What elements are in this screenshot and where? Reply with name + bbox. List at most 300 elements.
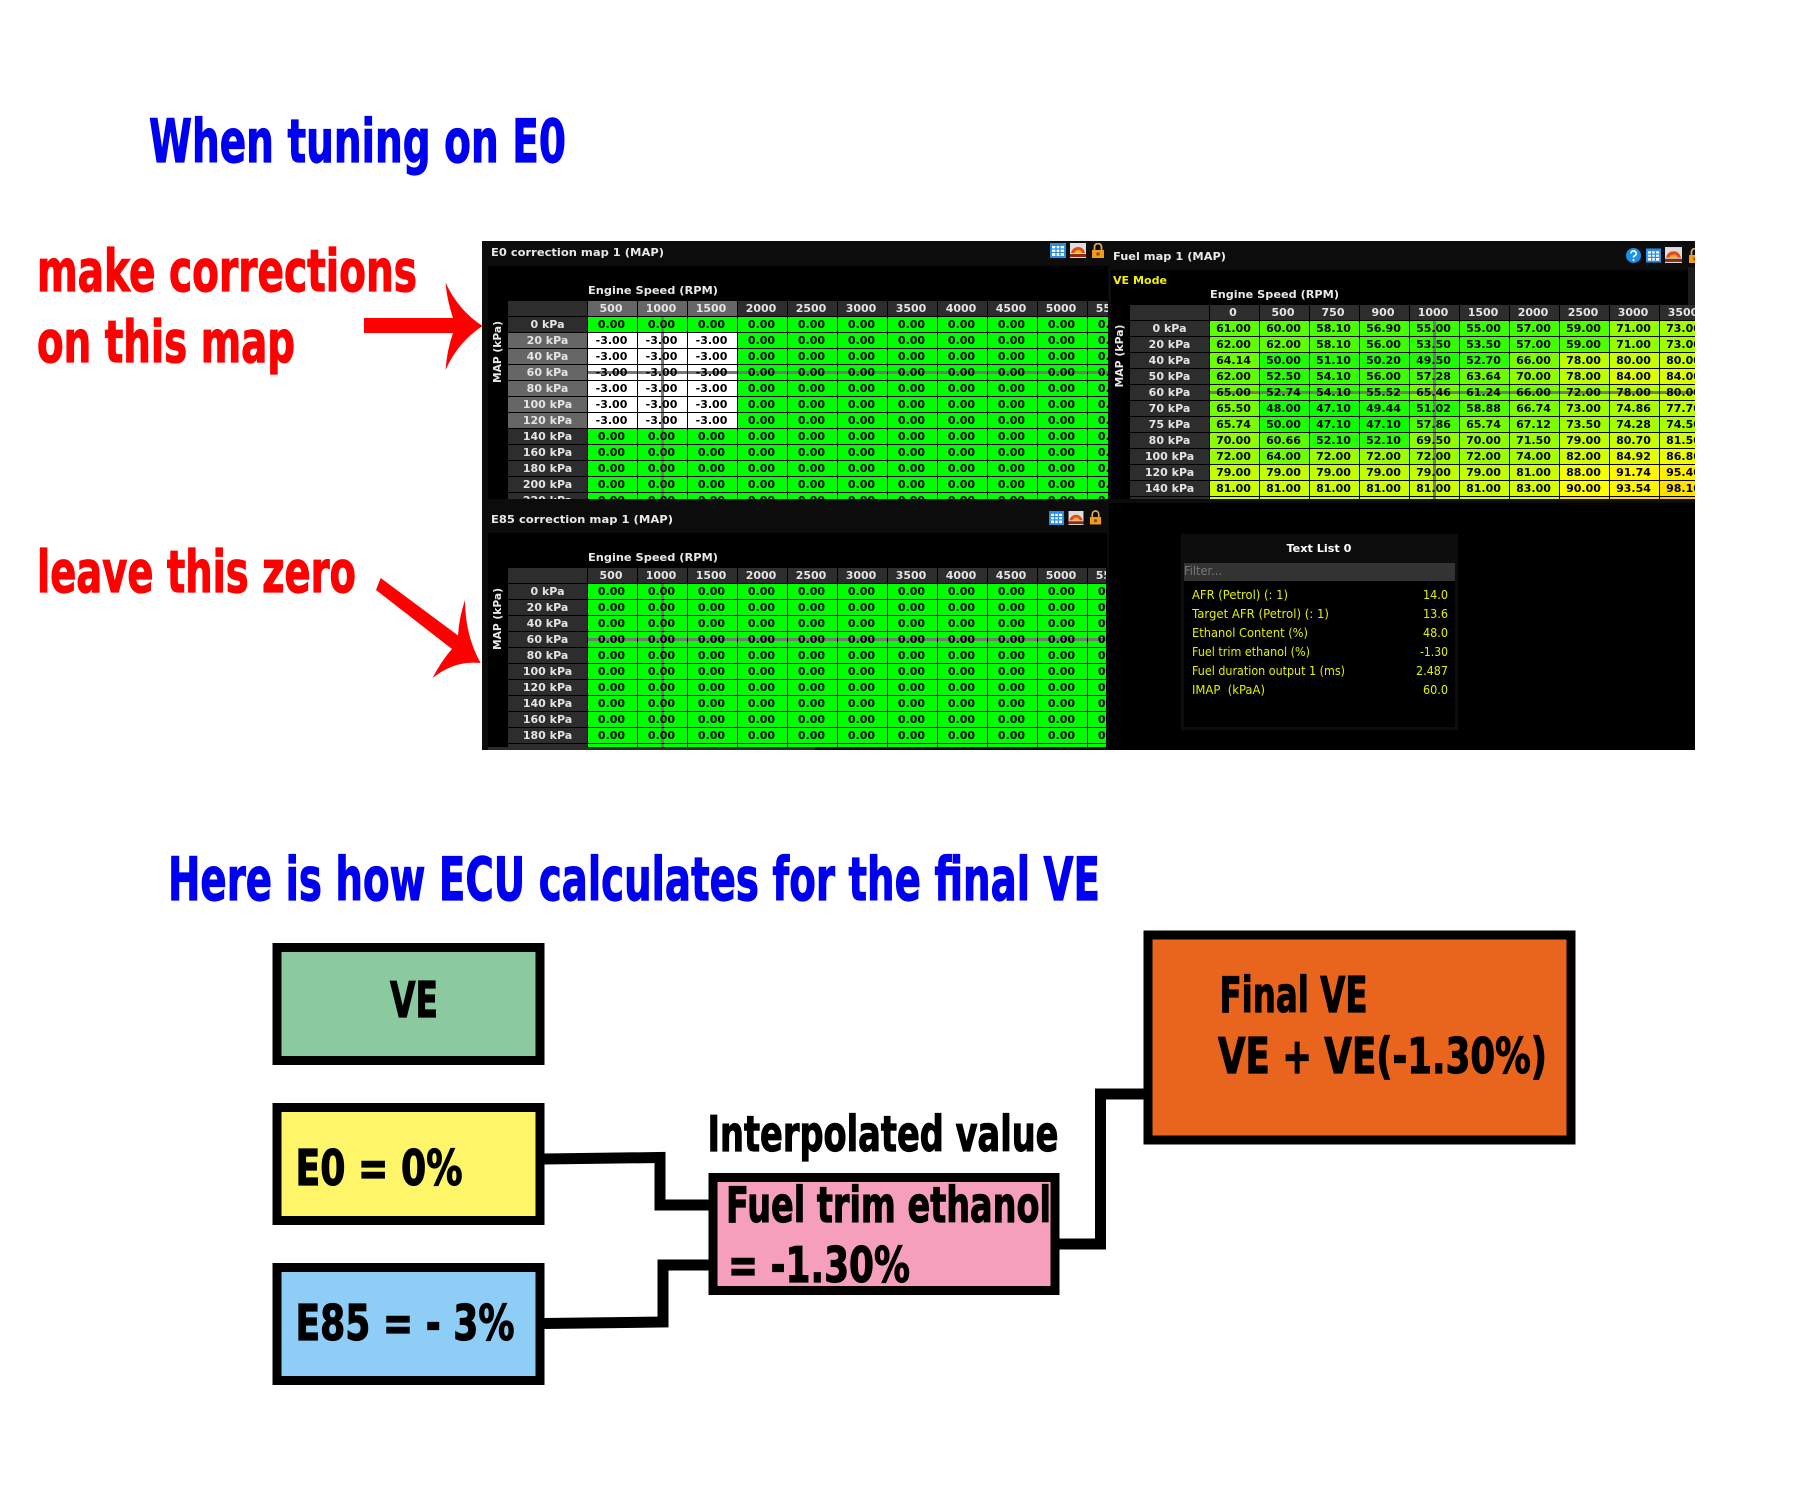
table: E0 correction map: 0.00 (648, 430, 675, 443)
table: fuel map: 52.50 (1266, 370, 1301, 383)
table: fuel map: 62.00 (1216, 338, 1251, 351)
table: fuel map: 63.64 (1466, 370, 1501, 383)
table: fuel map: 72.00 (1566, 386, 1601, 399)
table: fuel map: 71.00 (1616, 322, 1651, 335)
title: when tuning on E0: When tuning on E0 (149, 107, 566, 177)
table: fuel map: 900 (1372, 306, 1394, 319)
table: E85 correction map: 0.00 (948, 713, 975, 726)
table: E85 correction map: 0.00 (598, 633, 625, 646)
table: fuel map: 49.50 (1416, 354, 1451, 367)
table: E85 correction map: 0.00 (948, 681, 975, 694)
table: E0 correction map: -3.00 (646, 334, 677, 347)
table: E0 correction map: 0.00 (948, 398, 975, 411)
table: fuel map (1130, 305, 1695, 499)
table: E0 correction map: 0.00 (998, 478, 1025, 491)
table: E0 correction map: 0.00 (948, 430, 975, 443)
table: fuel map: 81.00 (1216, 482, 1251, 495)
table: E85 correction map: 0.00 (848, 681, 875, 694)
heading: E85 window title: E85 correction map 1 (MAP) (491, 513, 673, 526)
table: E0 correction map: 0.00 (798, 366, 825, 379)
table: fuel map: 93.54 (1616, 482, 1651, 495)
table: fuel map: 79.00 (1416, 466, 1451, 479)
table: E0 correction map: 5000 (1046, 302, 1076, 315)
table: E85 correction map: 160 kPa (523, 713, 572, 726)
box: fuel trim ethanol (713, 1177, 1055, 1294)
table: E0 correction map: -3.00 (696, 382, 727, 395)
icons: table, view, lock (1049, 511, 1101, 525)
table: fuel map: 59.00 (1566, 322, 1601, 335)
table: E85 correction map: 4000 (946, 569, 976, 582)
table: E0 correction map: 0.00 (948, 318, 975, 331)
table: fuel map: 81.00 (1516, 466, 1551, 479)
table: fuel map: 47.10 (1316, 418, 1351, 431)
table: fuel map: 52.74 (1266, 386, 1301, 399)
table: E85 correction map: 0.00 (748, 697, 775, 710)
table: E0 correction map: 0.00 (798, 414, 825, 427)
table: E0 correction map: 180 kPa (523, 462, 572, 475)
table: E0 correction map: -3.00 (596, 366, 627, 379)
table: E85 correction map: 0.00 (748, 713, 775, 726)
table: E0 correction map: -3.00 (646, 382, 677, 395)
table: E0 correction map: 0.00 (848, 478, 875, 491)
table: E0 correction map: 0.00 (598, 462, 625, 475)
table: fuel map: 2000 (1518, 306, 1548, 319)
table: fuel map: 78.00 (1566, 370, 1601, 383)
table: E85 correction map: 1000 (646, 569, 676, 582)
row: fuel duration: Fuel duration output 1 (ms) (1192, 664, 1345, 678)
table: fuel map: 69.50 (1416, 434, 1451, 447)
table: fuel map: 2500 (1568, 306, 1598, 319)
table: E0 correction map: 0.00 (998, 430, 1025, 443)
table: E0 correction map: 0.00 (998, 462, 1025, 475)
table: E85 correction map: 0.00 (998, 585, 1025, 598)
table: fuel map: 79.00 (1266, 466, 1301, 479)
table: fuel map: 60.00 (1266, 322, 1301, 335)
table: fuel map: 70.00 (1466, 434, 1501, 447)
table: E85 correction map: 0.00 (948, 697, 975, 710)
table: E0 correction map: 0.00 (798, 318, 825, 331)
table: E85 correction map: 0.00 (1048, 665, 1075, 678)
table: fuel map: 55.00 (1466, 322, 1501, 335)
table: E85 correction map: 0.00 (948, 585, 975, 598)
table: E0 correction map: 0.00 (798, 398, 825, 411)
table: E0 correction map: -3.00 (646, 414, 677, 427)
table: fuel map: 59.00 (1566, 338, 1601, 351)
row: AFR (1192, 588, 1448, 602)
table: E0 correction map: -3.00 (596, 382, 627, 395)
table: E0 correction map: 0.00 (898, 414, 925, 427)
table: fuel map: 70 kPa (1149, 402, 1190, 415)
callout: make corrections: on this map (37, 308, 295, 376)
table: E0 correction map: 0.00 (898, 398, 925, 411)
table: E85 correction map: 5000 (1046, 569, 1076, 582)
table: fuel map: 81.00 (1366, 482, 1401, 495)
table: E0 correction map: 0.00 (598, 318, 625, 331)
table: E0 correction map: 0.00 (998, 318, 1025, 331)
table: fuel map: 65.50 (1216, 402, 1251, 415)
table: E0 correction map: 0.00 (948, 350, 975, 363)
table: E85 correction map: 0.00 (898, 729, 925, 742)
table: E0 correction map: 0.00 (1048, 446, 1075, 459)
table: fuel map: 70.00 (1516, 370, 1551, 383)
table: E0 correction map: 0.00 (798, 350, 825, 363)
arrow: to E85 correction map (376, 578, 481, 678)
table: E85 correction map: 2000 (746, 569, 776, 582)
row: target AFR (1191, 607, 1448, 621)
table: E85 correction map: 0.00 (1048, 697, 1075, 710)
table: E85 correction map: 0.00 (948, 633, 975, 646)
table: E85 correction map: 0.00 (948, 665, 975, 678)
table: fuel map: 72.00 (1366, 450, 1401, 463)
table: fuel map: 61.24 (1466, 386, 1501, 399)
table: fuel map: 80.70 (1616, 434, 1651, 447)
table: fuel map: 48.00 (1266, 402, 1301, 415)
table: fuel map: 57.00 (1516, 338, 1551, 351)
table: fuel map: 54.10 (1316, 386, 1351, 399)
table: E0 correction map: 0.00 (648, 478, 675, 491)
table: fuel map: 73.00 (1566, 402, 1601, 415)
table: E0 correction map: 60 kPa (527, 366, 568, 379)
table: E85 correction map: 140 kPa (523, 697, 572, 710)
table: E0 correction map: 0.00 (798, 382, 825, 395)
table: E85 correction map: 0.00 (798, 681, 825, 694)
row: fuel trim ethanol: Fuel trim ethanol (%) (1192, 645, 1310, 659)
table: E85 correction map: 0.00 (848, 729, 875, 742)
table: E0 correction map: 0.00 (798, 478, 825, 491)
table: fuel map: 84.00 (1616, 370, 1651, 383)
table: E0 correction map: 0.00 (948, 334, 975, 347)
table: fuel map: 72.00 (1416, 450, 1451, 463)
table: E85 correction map: 0.00 (1048, 713, 1075, 726)
table: fuel map: 66.74 (1516, 402, 1551, 415)
table: fuel map: 20 kPa (1149, 338, 1190, 351)
table: E0 correction map: 0.00 (748, 382, 775, 395)
table: fuel map: 1500 (1468, 306, 1498, 319)
table: fuel map: 65.74 (1216, 418, 1251, 431)
table: E0 correction map: 0.00 (1048, 478, 1075, 491)
table: fuel map: 55.00 (1416, 322, 1451, 335)
table: E0 correction map: 0.00 (898, 430, 925, 443)
table: E85 correction map: 0.00 (698, 617, 725, 630)
table: fuel map: 64.00 (1266, 450, 1301, 463)
E85 window title, axis labels and icons (488, 510, 1102, 750)
table: E0 correction map: 160 kPa (523, 446, 572, 459)
table: E85 correction map: 0.00 (998, 649, 1025, 662)
table: E0 correction map: 0.00 (998, 414, 1025, 427)
connector: E85 to fuel trim (544, 1265, 709, 1324)
table: E0 correction map: 0.00 (848, 318, 875, 331)
table: E85 correction map: 0.00 (898, 681, 925, 694)
table: E0 correction map: -3.00 (696, 366, 727, 379)
table: fuel map: 71.00 (1616, 338, 1651, 351)
table: fuel map: 3000 (1618, 306, 1648, 319)
table: E85 correction map: 0.00 (698, 729, 725, 742)
table: E0 correction map: 0.00 (998, 446, 1025, 459)
table: E0 correction map: 0.00 (898, 366, 925, 379)
table: E0 correction map: 0.00 (798, 334, 825, 347)
table: fuel map: 47.10 (1316, 402, 1351, 415)
table: fuel map: 79.00 (1566, 434, 1601, 447)
table: E85 correction map: 0.00 (698, 665, 725, 678)
table: E0 correction map: 0.00 (848, 398, 875, 411)
table: fuel map: 50 kPa (1149, 370, 1190, 383)
table: E85 correction map: 0.00 (948, 729, 975, 742)
table: E85 correction map: 0.00 (748, 681, 775, 694)
panel: tuning software screenshot (482, 241, 1695, 750)
table: E0 correction map: 100 kPa (523, 398, 572, 411)
table: E85 correction map: 0.00 (848, 649, 875, 662)
table: E0 correction map: 0.00 (748, 446, 775, 459)
table: E0 correction map: 1500 (696, 302, 726, 315)
box: E0 (277, 1108, 540, 1220)
table: E0 correction map: 0.00 (748, 366, 775, 379)
table: E85 correction map: 0.00 (998, 601, 1025, 614)
table: E85 correction map: 0.00 (998, 681, 1025, 694)
table: E85 correction map: 0.00 (898, 665, 925, 678)
table: E0 correction map: 0.00 (1048, 382, 1075, 395)
table: E85 correction map: 0.00 (848, 665, 875, 678)
table: E0 correction map: 0.00 (698, 430, 725, 443)
table: E85 correction map: 0.00 (898, 713, 925, 726)
table: fuel map: 60.66 (1266, 434, 1301, 447)
table: fuel map: 56.00 (1366, 370, 1401, 383)
box: VE (277, 948, 540, 1060)
table: fuel map: 82.00 (1566, 450, 1601, 463)
row: fuel trim ethanol (1192, 645, 1448, 659)
table: E85 correction map: 0.00 (698, 697, 725, 710)
table: fuel map: 57.00 (1516, 322, 1551, 335)
table: E85 correction map: 0.00 (598, 585, 625, 598)
table: E0 correction map: -3.00 (596, 350, 627, 363)
table: E85 correction map: 0.00 (848, 601, 875, 614)
icons: table, view, lock (1050, 243, 1104, 258)
table: E0 correction map: 0.00 (798, 446, 825, 459)
box: fuel trim ethanol: = -1.30% (728, 1237, 910, 1294)
table: E0 correction map: 0.00 (748, 350, 775, 363)
table: E0 correction map: 500 (600, 302, 622, 315)
table: E0 correction map: 0.00 (598, 478, 625, 491)
table: E0 correction map: 0.00 (648, 318, 675, 331)
row: ethanol content: 48.0 (1423, 626, 1448, 640)
heading: fuel map window title: Fuel map 1 (MAP) (1113, 250, 1226, 263)
table: E0 correction map: 0.00 (1048, 318, 1075, 331)
table: fuel map: 74.00 (1516, 450, 1551, 463)
table: E0 correction map: 0.00 (698, 318, 725, 331)
table: E85 correction map: 0.00 (848, 585, 875, 598)
table: E0 correction map: 2500 (796, 302, 826, 315)
table: fuel map: 51.02 (1416, 402, 1451, 415)
table: E85 correction map: 0.00 (648, 601, 675, 614)
heading: E0 window title: E0 correction map 1 (MAP) (491, 246, 664, 259)
table: E85 correction map: 0.00 (698, 649, 725, 662)
axis label: engine speed: Engine Speed (RPM) (1210, 288, 1339, 301)
table: E85 correction map: 120 kPa (523, 681, 572, 694)
table: fuel map: 78.00 (1566, 354, 1601, 367)
row: ethanol content: Ethanol Content (%) (1192, 626, 1308, 640)
table: E85 correction map: 0.00 (798, 697, 825, 710)
table: E85 correction map: 0 kPa (530, 585, 564, 598)
table: fuel map: 75 kPa (1149, 418, 1190, 431)
label: interpolated value: Interpolated value (708, 1106, 1058, 1163)
table: E0 correction map: 0.00 (1048, 366, 1075, 379)
box: E85 (277, 1268, 540, 1380)
table: fuel map: 65.46 (1416, 386, 1451, 399)
table: E85 correction map: 0.00 (648, 617, 675, 630)
table: fuel map: 51.10 (1316, 354, 1351, 367)
table: E0 correction map: -3.00 (696, 398, 727, 411)
table: fuel map: 52.10 (1316, 434, 1351, 447)
table: fuel map: 81.00 (1416, 482, 1451, 495)
table: E85 correction map: 0.00 (998, 713, 1025, 726)
table: E0 correction map: 0.00 (848, 446, 875, 459)
arrow: to E0 correction map (364, 282, 482, 370)
table: E0 correction map: 0.00 (798, 462, 825, 475)
table: E85 correction map: 100 kPa (523, 665, 572, 678)
table: E0 correction map: 0.00 (1048, 398, 1075, 411)
row: target AFR: 13.6 (1423, 607, 1448, 621)
table: E85 correction map: 0.00 (748, 585, 775, 598)
callout: leave this zero: leave this zero (37, 538, 356, 606)
table: fuel map: 65.00 (1216, 386, 1251, 399)
table: E85 correction map: 0.00 (748, 729, 775, 742)
connector: E0 to fuel trim (544, 1158, 709, 1205)
table: E0 correction map: 0.00 (898, 382, 925, 395)
table: E0 correction map: 140 kPa (523, 430, 572, 443)
row: IMAP: 60.0 (1423, 683, 1448, 697)
table: E85 correction map: 0.00 (848, 633, 875, 646)
table: E0 correction map: 0.00 (948, 478, 975, 491)
box: final VE: Final VE (1220, 967, 1368, 1024)
table: fuel map: 62.00 (1266, 338, 1301, 351)
panel: E0 correction map window (482, 241, 1109, 503)
table: E85 correction map: 0.00 (648, 729, 675, 742)
table: E0 correction map: -3.00 (596, 414, 627, 427)
table: E85 correction map: 0.00 (598, 665, 625, 678)
table: E85 correction map: 0.00 (598, 617, 625, 630)
table: E0 correction map: 0.00 (748, 430, 775, 443)
axis label: MAP: MAP (kPa) (1113, 324, 1126, 388)
table: E0 correction map: 0.00 (848, 462, 875, 475)
table: E0 correction map: 3000 (846, 302, 876, 315)
table: fuel map: 73.50 (1566, 418, 1601, 431)
table: E85 correction map: 0.00 (648, 697, 675, 710)
table: fuel map: 1000 (1418, 306, 1448, 319)
table: E0 correction map: -3.00 (646, 350, 677, 363)
table: E0 correction map: 0.00 (648, 446, 675, 459)
table: E0 correction map: 0.00 (1048, 350, 1075, 363)
panel: text list (1181, 534, 1458, 730)
axis label: MAP: MAP (kPa) (491, 588, 504, 650)
table: E85 correction map: 0.00 (998, 697, 1025, 710)
table: E0 correction map: 0.00 (948, 446, 975, 459)
table: fuel map: 40 kPa (1149, 354, 1190, 367)
icons: help, table, view, lock (1626, 247, 1701, 263)
table: E85 correction map: 4500 (996, 569, 1026, 582)
callout: make corrections (37, 237, 417, 376)
table: E0 correction map: 0.00 (848, 414, 875, 427)
table: fuel map: 71.50 (1516, 434, 1551, 447)
table: E0 correction map: -3.00 (646, 366, 677, 379)
table: E85 correction map: 0.00 (648, 713, 675, 726)
table: E85 correction map: 0.00 (648, 585, 675, 598)
axis label: MAP: MAP (kPa) (491, 321, 504, 383)
connector: fuel trim to final VE (1059, 1094, 1144, 1244)
table: E85 correction map: 0.00 (798, 713, 825, 726)
table: fuel map: 80.00 (1616, 354, 1651, 367)
table: E85 correction map: 0.00 (698, 681, 725, 694)
table: E85 correction map: 0.00 (748, 649, 775, 662)
row: fuel duration: 2.487 (1416, 664, 1448, 678)
table: E0 correction map: -3.00 (696, 350, 727, 363)
table: E0 correction map: 0.00 (948, 462, 975, 475)
table: E0 correction map: 4500 (996, 302, 1026, 315)
table: E85 correction map: 0.00 (998, 633, 1025, 646)
table: E0 correction map: 0.00 (998, 350, 1025, 363)
heading: how ECU calculates: Here is how ECU calculates for the final VE (168, 845, 1100, 915)
table: E85 correction map: 0.00 (648, 665, 675, 678)
table: E0 correction map: 40 kPa (527, 350, 568, 363)
table: E0 correction map: 4000 (946, 302, 976, 315)
table: fuel map: 50.00 (1266, 354, 1301, 367)
table: fuel map: 79.00 (1316, 466, 1351, 479)
table: E0 correction map: -3.00 (596, 334, 627, 347)
table: E0 correction map: 0.00 (698, 446, 725, 459)
panel: fuel map window (1109, 241, 1695, 503)
scrollbar (1688, 267, 1695, 305)
table: E0 correction map: -3.00 (696, 414, 727, 427)
table: E0 correction map: 1000 (646, 302, 676, 315)
table: fuel map: 58.10 (1316, 322, 1351, 335)
table: E85 correction map: 0.00 (898, 617, 925, 630)
table: fuel map: 100 kPa (1145, 450, 1194, 463)
table: E85 correction map: 0.00 (848, 617, 875, 630)
heading: text list title: Text List 0 (1286, 542, 1352, 555)
table: fuel map: 67.12 (1516, 418, 1551, 431)
table: E85 correction map: 0.00 (1048, 617, 1075, 630)
table: E85 correction map: 0.00 (798, 649, 825, 662)
table: E85 correction map: 0.00 (798, 729, 825, 742)
table: fuel map: 58.88 (1466, 402, 1501, 415)
table: fuel map: 62.00 (1216, 370, 1251, 383)
table: E0 correction map: -3.00 (696, 334, 727, 347)
table: fuel map: 81.00 (1316, 482, 1351, 495)
table: E0 correction map: 0.00 (848, 350, 875, 363)
table: E85 correction map: 2500 (796, 569, 826, 582)
table: E85 correction map: 0.00 (948, 617, 975, 630)
table: fuel map: 56.90 (1366, 322, 1401, 335)
table: E0 correction map: 0.00 (748, 462, 775, 475)
table: E85 correction map: 0.00 (1048, 681, 1075, 694)
table: fuel map: 0 kPa (1152, 322, 1186, 335)
box: final VE: VE + VE(-1.30%) (1218, 1028, 1547, 1085)
table: fuel map: 83.00 (1516, 482, 1551, 495)
table: E85 correction map: 0.00 (848, 713, 875, 726)
table: E85 correction map: 0.00 (748, 665, 775, 678)
table: E0 correction map: -3.00 (596, 398, 627, 411)
table: E85 correction map: 0.00 (1048, 729, 1075, 742)
table: fuel map: 52.10 (1366, 434, 1401, 447)
table: fuel map: 49.44 (1366, 402, 1401, 415)
table: fuel map: 52.70 (1466, 354, 1501, 367)
table: E0 correction map: 0.00 (898, 462, 925, 475)
table: E0 correction map: 0.00 (998, 382, 1025, 395)
table: fuel map: 55.52 (1366, 386, 1401, 399)
box: E0: E0 = 0% (296, 1140, 462, 1197)
table: fuel map: 81.00 (1466, 482, 1501, 495)
table: E85 correction map: 0.00 (648, 633, 675, 646)
table: E0 correction map: 0.00 (998, 366, 1025, 379)
table: E85 correction map: 0.00 (798, 585, 825, 598)
